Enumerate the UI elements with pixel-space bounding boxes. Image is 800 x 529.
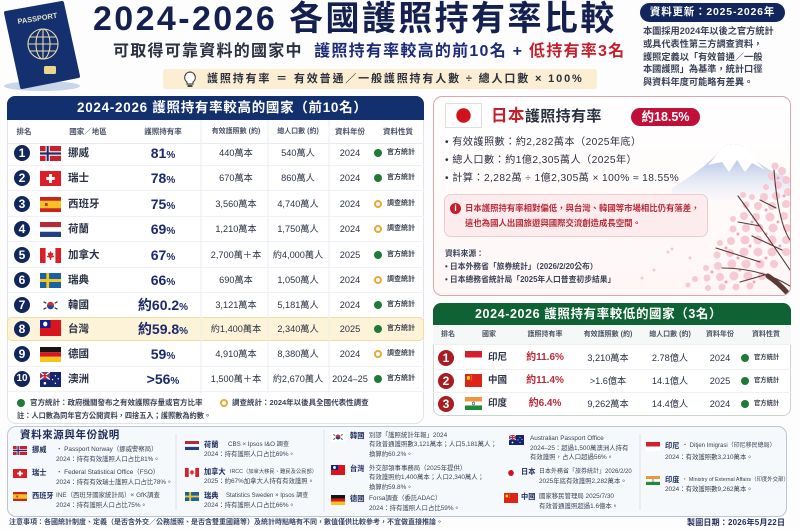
japan rate pill: 約18.5% [642,110,689,124]
row 3 spain: 調查統計 [387,200,415,207]
panel: japan [433,96,791,296]
source india: ‧ Ministry of External Affairs（印度外交部） [682,477,789,483]
low row 1 indonesia: 印尼 [488,352,507,363]
source south korea: 別謬「護照統計年報」2024 [369,432,447,439]
row 8 taiwan highlighted: 2,340萬人 [277,324,319,334]
low 3 column headers: 資料性質 [752,331,780,338]
low row 3 india: 約6.4% [529,398,561,409]
source switzerland: 瑞士 [32,468,46,477]
low row 1 indonesia: 1 [443,351,449,365]
row 7 south korea: 約60.2% [138,297,188,313]
row 3 spain: 2024 [340,199,360,209]
row 9 germany: 調查統計 [387,350,415,357]
source norway: 2024：持有有效護照人口占比81%。 [56,456,160,463]
japan sources: 資料來源： [445,249,484,258]
row 10 australia: >56% [147,371,179,387]
source germany: 2024：持有護照人口占比59%。 [369,505,460,512]
row 2 switzerland: 670萬本 [219,173,253,183]
row 4 netherlands: 荷蘭 [68,223,89,235]
low row 2 china: 2025 [710,376,730,386]
data note: 與資料年度可能略有差異。 [643,77,753,87]
update badge [640,3,785,22]
production date: 製圖日期：2026年5月22日 [687,518,785,527]
source taiwan: 換算約59.8%。 [369,484,413,491]
low row 3 india [438,396,779,412]
source south korea: 有效普通護照數3,121萬本；人口5,181萬人； [369,441,497,448]
japan sources: • 日本總務省統計局「2025年人口普查初步結果」 [445,275,615,284]
icon: light bulb [184,71,196,87]
row 5 canada: 2025 [340,250,360,260]
footnote: 注意事項：各國統計制度、定義（是否含外交／公務護照、是否含雙重國籍等）及統計時點略有不同，數值僅供比較參考，不宜做直接推論。 [9,519,443,526]
low row 1 indonesia: 2.78億人 [652,353,688,363]
formula text: 護照持有率 ＝ 有效普通／一般護照持有人數 ÷ 總人口數 × 100% [207,73,584,85]
source switzerland [13,468,172,486]
row 8 taiwan highlighted: 台灣 [68,323,89,335]
low row 2 china: 2 [443,374,449,388]
row 7 south korea: 3,121萬本 [215,300,257,310]
data note: 本圖採用2024年以後之官方統計 [643,26,774,36]
row 8 taiwan highlighted: 2025 [340,324,360,334]
source china: 有效普通護照超過1.6億本。 [539,503,618,510]
legend [17,398,369,420]
source germany [331,494,460,512]
low 3 header [433,303,791,325]
low row 1 indonesia: 2024 [710,353,730,363]
row 10 australia [8,367,424,392]
row 5 canada: 67% [151,247,175,263]
row 9 germany: 2024 [340,349,360,359]
row 10 australia: 官方統計 [387,375,415,382]
row 5 canada: 官方統計 [387,251,415,258]
row 1 norway: 440萬本 [219,148,253,158]
row 7 south korea: 5,181萬人 [277,300,319,310]
column headers: 資料年份 [335,127,365,136]
row 9 germany: 8,380萬人 [277,349,319,359]
source spain: 西班牙 [32,491,54,500]
japan flag [445,103,482,128]
row 4 netherlands: 69% [151,221,175,237]
source netherlands: 荷蘭 [204,440,218,449]
japan sources: • 日本外務省「旅券統計」（2026/2/20公布） [445,262,598,271]
legend: 官方統計：政府機關發布之有效護照存量或官方比率 [30,398,202,407]
source canada: 加拿大 [204,467,226,476]
low row 2 china: 14.1億人 [652,376,688,386]
column headers: 總人口數 (約) [277,128,319,135]
japan stats [445,136,679,184]
low 3 column headers: 總人口數 (約) [649,331,691,338]
row 7 south korea: 7 [19,298,25,312]
row 2 switzerland: 2 [19,171,25,185]
low 3 header: 2024-2026 護照持有率較低的國家（3名） [475,307,722,321]
row 3 spain: 4,740萬人 [277,199,319,209]
illustration: fuji and cherry blossoms [640,144,790,294]
source canada: 2025：約67%加拿大人持有有效護照。 [204,478,314,485]
source india: 印度 [665,475,679,484]
row 10 australia: 10 [16,373,28,384]
row 7 south korea [8,293,424,318]
source india [646,475,789,493]
row 9 germany: 4,910萬本 [215,349,257,359]
low 3 column headers: 排名 [441,331,455,338]
row 5 canada: 2,700萬＋本 [211,250,261,260]
source japan: 2025年底有效護照2,282萬本。 [539,478,627,485]
row 9 germany: 9 [19,347,25,361]
low row 2 china: 約11.4% [526,375,564,386]
source china: 中國 [521,492,535,501]
update badge: 資料更新：2025-2026年 [650,6,775,18]
source germany: Forsa調查（委託ADAC） [369,495,441,502]
low 3 column headers: 有效護照數 (約) [584,331,632,338]
panel: sources [7,426,787,517]
title: 2024-2026 各國護照持有率比較 [93,0,617,38]
row 2 switzerland [8,166,424,191]
japan heading: 日本護照持有率 [491,107,602,125]
row 8 taiwan highlighted: 8 [19,322,25,336]
source germany: 德國 [350,494,364,503]
low row 2 china: 官方統計 [754,377,779,384]
source spain: INE（西班牙國家統計局）× GfK調查 [56,492,160,499]
row 7 south korea: 2024 [340,300,360,310]
japan stats: • 有效護照數：約2,282萬本（2025年底） [445,137,642,148]
row 6 sweden [8,268,424,293]
row 10 australia: 1,500萬＋本 [211,374,261,384]
source switzerland: ‧ Federal Statistical Office（FSO） [56,469,159,476]
source australia: Australian Passport Office [530,435,604,442]
low row 1 indonesia: 3,210萬本 [587,353,629,363]
row 5 canada: 約4,000萬人 [273,250,323,260]
source norway: 挪威 [32,445,46,454]
row 2 switzerland: 瑞士 [68,172,89,184]
row 1 norway: 540萬人 [281,148,315,158]
source netherlands: 2024：持有護照人口占比69%。 [204,451,295,458]
panel: low 3 table [433,303,791,416]
row 1 norway: 官方統計 [387,149,415,156]
icon: passport: PASSPORT [17,11,58,26]
row 4 netherlands: 1,750萬人 [277,224,319,234]
row 8 taiwan highlighted: 約59.8% [138,321,188,337]
row 8 taiwan highlighted: 約1,400萬本 [211,324,261,334]
row 1 norway [8,141,424,166]
source netherlands [185,440,295,458]
low row 2 china: >1.6億本 [590,376,626,386]
source japan: 日本 [521,467,535,476]
low row 3 india: 3 [443,397,449,411]
low 3 column headers: 護照持有率 [528,331,562,338]
callout text [465,203,700,228]
row 3 spain: 3 [19,197,25,211]
row 2 switzerland: 860萬人 [281,173,315,183]
source norway: ‧ Passport Norway（挪威警察局） [56,446,158,453]
source canada [185,467,317,485]
row 4 netherlands [8,217,424,242]
source australia: 2024–25：超過1,500萬澳洲人持有 [530,445,628,452]
row 9 germany: 德國 [68,348,89,360]
source spain [13,491,160,509]
row 6 sweden: 2024 [340,275,360,285]
source sweden: Statistics Sweden × Ipsos 調查 [226,493,308,499]
column headers: 國家／地區 [69,127,107,136]
row 1 norway: 挪威 [68,147,89,159]
row 1 norway: 81% [151,145,175,161]
column headers: 有效護照數 (約) [212,128,260,135]
callout text: 這也為國人出國旅遊與國際交流創造成長空間。 [465,218,641,228]
source switzerland: 2024：持有有效瑞士護照人口占比78%。 [56,479,172,486]
source australia: 有效護照，占人口超過56%。 [530,454,613,461]
japan stats: • 總人口數：約1億2,305萬人（2025年） [445,155,637,166]
formula bar [163,69,597,89]
column headers: 資料性質 [383,127,413,136]
top 10 header [7,96,424,120]
column headers: 護照持有率 [144,127,182,136]
source taiwan: 有效護照約1,400萬本；人口2,340萬人； [369,474,484,481]
source taiwan: 外交部領事事務局（2025年提供） [369,465,466,472]
row 6 sweden: 690萬本 [219,275,253,285]
low row 3 india: 2024 [710,399,730,409]
row 3 spain: 3,560萬本 [215,199,257,209]
icon: passport [4,1,80,91]
low row 1 indonesia [433,347,791,370]
row 3 spain [8,192,424,217]
row 8 taiwan highlighted [7,317,424,341]
source china: 國家移民管理局 2025/7/30 [539,493,614,500]
row 6 sweden: 調查統計 [387,276,415,283]
data note: 護照定義以「有效普通／一般 [643,52,762,62]
row 7 south korea: 官方統計 [387,301,415,308]
source sweden: 瑞典 [204,491,218,500]
row 3 spain: 西班牙 [68,198,100,210]
icon: info [450,203,461,214]
row 2 switzerland: 78% [151,170,175,186]
sources heading: 資料來源與年份說明 [20,429,120,441]
source norway [13,445,160,463]
source australia [509,435,628,461]
legend: 調查統計：2024年以後具全國代表性調查 [232,398,369,407]
row 4 netherlands: 4 [19,222,25,236]
row 10 australia: 2024–25 [332,374,368,384]
low row 3 india: 9,262萬本 [587,399,629,409]
column headers [8,120,424,144]
source sweden: 2024：持有護照人口占比66%。 [204,502,295,509]
row 9 germany: 59% [151,346,175,362]
row 3 spain: 75% [151,196,175,212]
row 5 canada: 5 [19,248,25,262]
source south korea: 韓國 [350,431,364,440]
source japan: 日本外務省「旅券統計」2026/2/20 [539,469,632,475]
callout text: 日本護照持有率相對偏低，與台灣、韓國等市場相比仍有落差， [465,203,700,213]
row 9 germany [8,342,424,367]
row 2 switzerland: 2024 [340,173,360,183]
row 1 norway: 2024 [340,148,360,158]
subtitle: 可取得可靠資料的國家中 護照持有率較高的前10名 + 低持有率3名 [113,43,625,60]
row 6 sweden: 1,050萬人 [277,275,319,285]
source china [504,492,618,510]
japan sources [445,249,615,284]
source netherlands: CBS × Ipsos I&O 調查 [228,441,289,448]
low row 2 china [433,370,791,393]
source taiwan: 台灣 [350,464,364,473]
source indonesia [646,441,776,461]
row 5 canada [8,243,424,268]
source taiwan [331,464,484,491]
row 6 sweden: 66% [151,272,175,288]
japan rate pill [631,108,700,126]
icon: info: i [454,203,457,213]
top 10 header: 2024-2026 護照持有率較高的國家（前10名） [77,100,368,115]
low row 1 indonesia: 約11.6% [526,352,564,363]
source indonesia: 印尼 [665,441,679,450]
source india: 2024：有效護照數9,262萬本。 [665,486,753,493]
row 6 sweden: 6 [19,273,25,287]
japan stats: • 計算：2,282萬 ÷ 1億2,305萬 × 100% ≈ 18.55% [445,173,679,184]
row 10 australia: 約2,670萬人 [273,374,323,384]
row 8 taiwan highlighted: 官方統計 [387,325,415,332]
low row 3 india: 官方統計 [754,400,779,407]
low row 3 india: 14.4億人 [652,399,688,409]
low row 1 indonesia: 官方統計 [754,354,779,361]
low 3 column headers: 資料年份 [706,331,734,338]
column headers: 排名 [16,127,32,136]
row 6 sweden: 瑞典 [68,274,89,286]
data note: 或具代表性第三方調查資料， [643,39,762,49]
row 4 netherlands: 調查統計 [387,225,415,232]
low 3 column headers [433,325,791,345]
row 1 norway: 1 [19,146,25,160]
row 4 netherlands: 2024 [340,224,360,234]
source south korea [331,431,497,458]
row 4 netherlands: 1,210萬本 [215,224,257,234]
source spain: 2024：持有護照人口占比75%。 [56,502,147,509]
data note [643,26,774,87]
source sweden [185,491,308,509]
low row 2 china: 中國 [488,375,507,386]
legend: 註：人口數為同年官方公開資料，四捨五入；護照數為約數。 [17,411,211,420]
low 3 column headers: 國家 [482,331,496,338]
panel: top 10 table [7,96,424,424]
source japan [504,467,632,485]
source canada: IRCC（加拿大移民、難民及公民部） [230,469,317,475]
source indonesia: ‧ Ditjen Imigrasi（印尼移民總局） [682,443,776,449]
source indonesia: 2024：有效護照數3,210萬本。 [665,454,753,461]
row 2 switzerland: 官方統計 [387,174,415,181]
data note: 本國護照」為基準，統計口徑 [643,64,762,74]
row 7 south korea: 韓國 [68,299,89,311]
japan callout [444,194,708,237]
row 5 canada: 加拿大 [68,249,100,261]
low row 3 india: 印度 [488,398,507,409]
source south korea: 換算約60.2%。 [369,451,413,458]
row 10 australia: 澳洲 [68,373,89,385]
